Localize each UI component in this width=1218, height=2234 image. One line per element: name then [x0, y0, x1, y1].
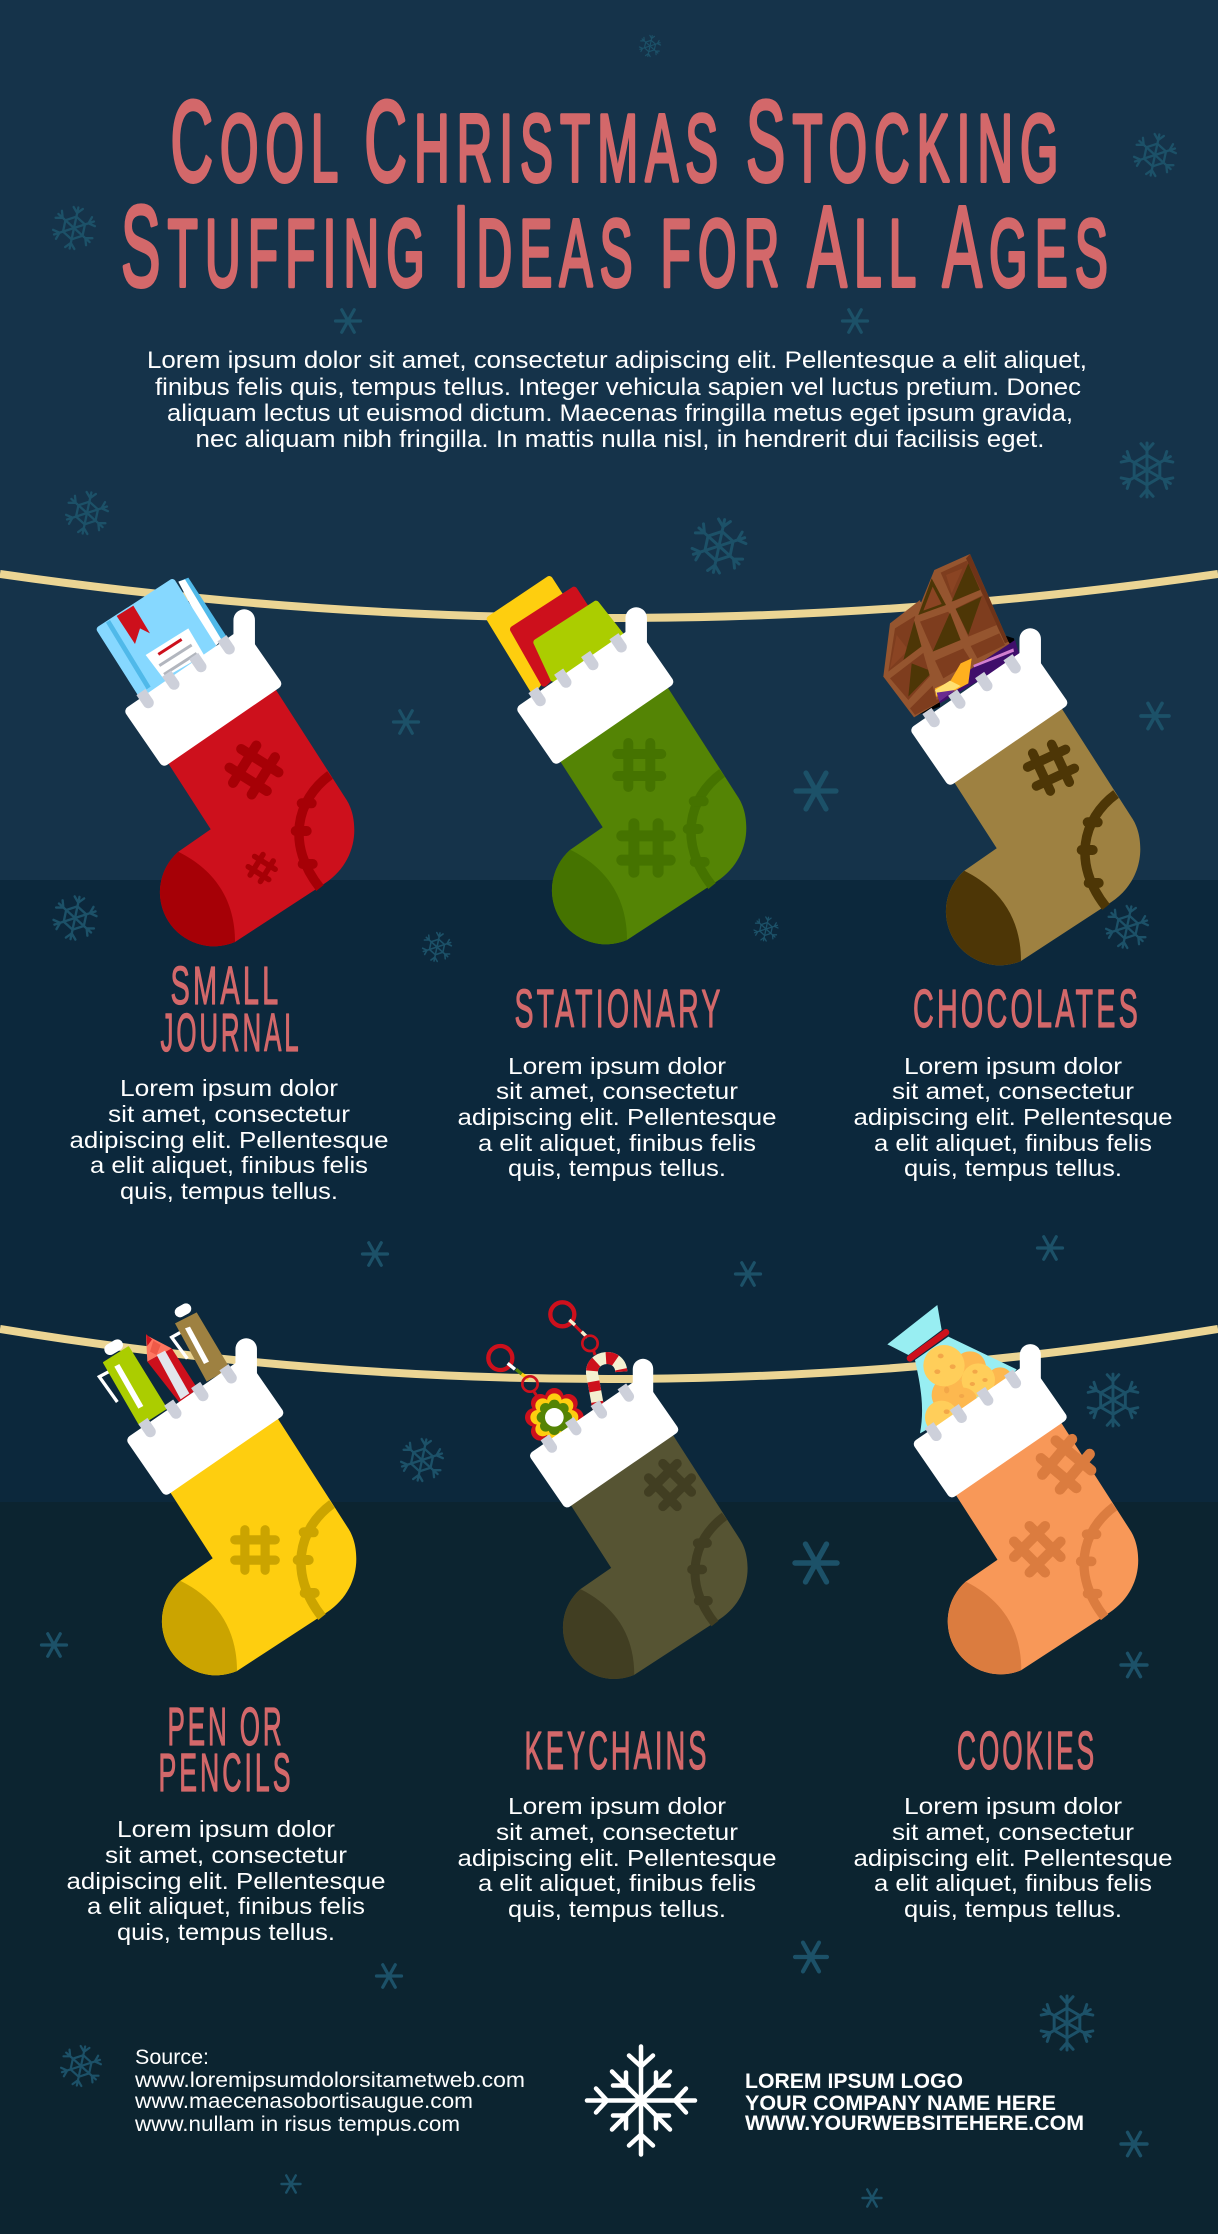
text block: chocolates: Lorem ipsum dolor	[904, 1053, 1122, 1079]
stocking: orange	[919, 1355, 1138, 1674]
text block: stationary: a elit aliquet, finibus felis	[478, 1130, 756, 1156]
text block: chocolates: quis, tempus tellus.	[904, 1155, 1122, 1181]
text block: small journal: Lorem ipsum dolor	[120, 1075, 338, 1101]
text block: cookies: Lorem ipsum dolor	[904, 1793, 1122, 1819]
text block: cookies: quis, tempus tellus.	[904, 1896, 1122, 1922]
stocking: red	[130, 620, 354, 946]
text block: small journal: a elit aliquet, finibus felis	[90, 1152, 368, 1178]
company text: YOUR COMPANY NAME HERE	[745, 2092, 1056, 2115]
panel: chocolates	[854, 554, 1172, 1181]
company text: LOREM IPSUM LOGO	[745, 2070, 963, 2093]
source text: www.loremipsumdolorsitametweb.com	[134, 2069, 525, 2092]
text block: small journal	[70, 1075, 388, 1204]
icon: journal	[100, 578, 227, 695]
text block: stationary: sit amet, consectetur	[496, 1078, 738, 1104]
text block: stationary: adipiscing elit. Pellentesque	[458, 1104, 776, 1130]
intro text: aliquam lectus ut euismod dictum. Maecenas fringilla metus eget ipsum gravida,	[167, 400, 1073, 427]
heading: small journal: SMALL	[170, 956, 282, 1016]
panel: small journal: JOURNAL	[160, 1003, 302, 1063]
text block: pen or pencils: adipiscing elit. Pellentesque	[66, 1868, 386, 1894]
stocking: tan	[916, 639, 1140, 965]
icon: pens and pencil	[99, 1309, 230, 1425]
text block: keychains: sit amet, consectetur	[496, 1819, 738, 1845]
text block: cookies	[854, 1793, 1172, 1922]
panel: small journal	[70, 578, 388, 1204]
intro text: Lorem ipsum dolor sit amet, consectetur adipiscing elit. Pellentesque a elit aliquet,	[147, 347, 1087, 374]
icon: keychains	[488, 1302, 621, 1447]
text block: cookies: a elit aliquet, finibus felis	[874, 1870, 1152, 1896]
panel: pen or pencils: PENCILS	[158, 1743, 294, 1803]
heading: small journal	[160, 956, 302, 1063]
intro text: nec aliquam nibh fringilla. In mattis nulla nisl, in hendrerit dui facilisis eget.	[196, 426, 1044, 453]
text block: keychains: Lorem ipsum dolor	[508, 1793, 726, 1819]
text block: keychains: adipiscing elit. Pellentesque	[458, 1845, 776, 1871]
rope: bottom	[0, 1329, 1218, 1379]
intro text	[147, 347, 1087, 453]
heading: keychains: KEYCHAINS	[524, 1721, 710, 1781]
rope: top	[0, 574, 1218, 618]
text block: small journal: adipiscing elit. Pellentesque	[70, 1127, 388, 1153]
text block: stationary: Lorem ipsum dolor	[508, 1053, 726, 1079]
text block: stationary: quis, tempus tellus.	[508, 1155, 726, 1181]
text block: cookies: sit amet, consectetur	[892, 1819, 1134, 1845]
text block: pen or pencils: Lorem ipsum dolor	[117, 1816, 335, 1842]
text block: pen or pencils	[66, 1816, 386, 1945]
text block: pen or pencils: a elit aliquet, finibus felis	[87, 1893, 365, 1919]
stocking: olive	[535, 1369, 748, 1679]
source text: www.nullam in risus tempus.com	[134, 2113, 460, 2136]
company text	[745, 2070, 1084, 2135]
stocking: yellow	[132, 1349, 356, 1675]
title	[121, 78, 1115, 311]
text block: small journal: sit amet, consectetur	[108, 1101, 350, 1127]
text block: pen or pencils: sit amet, consectetur	[105, 1842, 347, 1868]
text block: chocolates: a elit aliquet, finibus felis	[874, 1130, 1152, 1156]
text block: keychains: quis, tempus tellus.	[508, 1896, 726, 1922]
stocking: green	[522, 618, 746, 944]
icon: flower charm	[525, 1388, 584, 1447]
text block: chocolates	[854, 1053, 1172, 1181]
source text	[134, 2046, 525, 2136]
text block: chocolates: adipiscing elit. Pellentesque	[854, 1104, 1172, 1130]
title: STUFFING IDEAS FOR ALL AGES	[121, 183, 1115, 311]
heading: pen or pencils	[158, 1697, 294, 1803]
text block: small journal: quis, tempus tellus.	[120, 1178, 338, 1204]
text block: cookies: adipiscing elit. Pellentesque	[854, 1845, 1172, 1871]
panel: keychains	[458, 1302, 776, 1922]
heading: stationary: STATIONARY	[514, 979, 724, 1039]
panel: stationary	[458, 579, 776, 1181]
panel: cookies	[854, 1305, 1172, 1922]
icon: logo snowflake	[587, 2046, 695, 2154]
source text: Source:	[135, 2046, 209, 2069]
text block: keychains	[458, 1793, 776, 1922]
text block: stationary	[458, 1053, 776, 1181]
intro text: finibus felis quis, tempus tellus. Integer vehicula sapien vel luctus pretium. Donec	[155, 374, 1081, 401]
source text: www.maecenasobortisaugue.com	[134, 2090, 473, 2113]
text block: keychains: a elit aliquet, finibus felis	[478, 1870, 756, 1896]
icon: stationery cards	[490, 579, 622, 690]
panel: pen or pencils	[66, 1309, 386, 1945]
icon: cookie bag	[887, 1305, 1017, 1434]
icon: chocolate bars	[883, 554, 1020, 717]
text block: chocolates: sit amet, consectetur	[892, 1078, 1134, 1104]
heading: pen or pencils: PEN OR	[168, 1697, 284, 1757]
text block: pen or pencils: quis, tempus tellus.	[117, 1919, 335, 1945]
company text: WWW.YOURWEBSITEHERE.COM	[745, 2112, 1084, 2135]
